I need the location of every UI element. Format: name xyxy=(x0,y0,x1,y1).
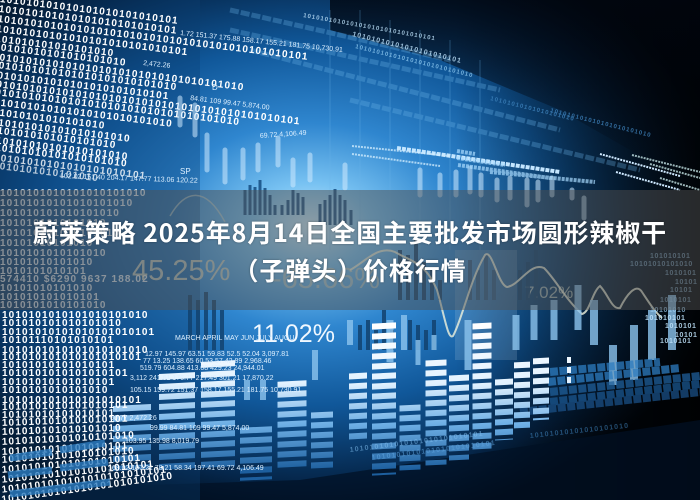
large percentage labels xyxy=(132,255,573,348)
upper-left data numbers: 2,472.26 xyxy=(143,60,171,70)
right binary column: 10101 xyxy=(670,287,692,294)
lower candlesticks xyxy=(247,285,672,400)
lower-left binary block: 101010101010101010 xyxy=(2,423,122,438)
right binary column: 10101010101010 xyxy=(630,261,693,268)
lower numeric labels: 103.95 135.98 8,019.79 xyxy=(125,438,199,445)
right binary column: 1010101 xyxy=(665,323,696,330)
lower numeric labels: 77 13.25 138.65 60.53 57.42.89 2,968.46 xyxy=(143,358,272,365)
title xyxy=(33,214,667,288)
lower-left binary block: 10101010101010101010 xyxy=(2,430,135,448)
lower-left binary block: 10101010101010101010101 xyxy=(1,459,155,486)
lower-left binary block: 10101010101010101010 xyxy=(1,446,135,466)
lower-left binary block: 10101110101010101 xyxy=(2,335,114,346)
upper-left binary block: 10101010101010101010101010101 xyxy=(0,24,189,58)
lower numeric labels: 99.99 84.81 109 99.47 5,874.00 xyxy=(150,425,249,432)
right binary column: 101010101 xyxy=(645,315,685,322)
upper-left data numbers: 69.72 4,106.49 xyxy=(260,130,307,140)
price line curve xyxy=(350,250,662,336)
band binary rows: 1010101010101010 xyxy=(0,248,107,259)
bottom binary reflection xyxy=(349,423,630,462)
large percentage labels: -65.66% xyxy=(272,263,380,295)
band binary rows: 101010101010101 xyxy=(0,292,100,303)
lower numeric labels: 12.97 145.97 63.51 59.83 52.5 52.04 3,097.81 xyxy=(145,351,289,358)
large percentage labels: 45.25% xyxy=(132,255,230,287)
upper-left data numbers: 84.81 109 99.47 5,874.00 xyxy=(190,95,270,112)
lower-left binary block: 1010101010101010101 xyxy=(2,414,129,429)
right binary column: 10101 xyxy=(675,332,697,339)
lower numeric labels: 3,112 241.61 176.77 217.49 301.21 17,870.22 xyxy=(130,375,274,382)
upper-left data numbers: SP xyxy=(180,167,191,176)
lower-left binary block: 1010101010101010101010101 xyxy=(1,465,168,496)
lower numeric labels: 105.15 159.72 151.37 158.17 155.21 181.75 10,730.91 xyxy=(130,387,301,394)
band binary rows: 1010101010101010 xyxy=(0,300,107,311)
lower-left binary block: 101010101010101010101 xyxy=(1,453,142,476)
upper binary rows: right: 10101010101010101010 xyxy=(490,96,575,123)
large percentage labels: 7.02% xyxy=(525,283,573,302)
lower-left binary block: 10101010101010101 xyxy=(2,377,115,388)
upper-left data numbers: D xyxy=(212,83,218,92)
lower-left binary block: 1010101010101010101 xyxy=(2,400,129,413)
upper binary rows: right: 10101010101010101010101 xyxy=(352,31,462,65)
mini bar cluster top center xyxy=(245,180,351,225)
right binary column: 1010101 xyxy=(665,270,696,277)
band binary rows: 10101010101010 xyxy=(0,238,93,249)
upper binary rows: right xyxy=(303,13,652,139)
band binary rows: 10101010101010 xyxy=(0,257,93,268)
lower numeric labels: 168.02 107.21 78.21 58.34 197.41 69.72 4,106.49 xyxy=(108,465,264,472)
upper binary rows: right: 101010101010101010101010 xyxy=(550,108,652,139)
upper binary rows: right: 1010101010101010101010101010101 xyxy=(303,13,436,42)
band binary rows: 101010101010101010 xyxy=(0,228,120,239)
right binary column: 1010101 xyxy=(660,338,691,345)
right binary column: 10101010 xyxy=(650,307,686,314)
lower-left binary block: 101010101010101010 xyxy=(2,318,122,329)
lower numeric labels xyxy=(108,335,301,472)
lower numeric labels: 519.79 604.88 413.08 429.23 24,944.01 xyxy=(140,365,265,372)
lower-left binary block: 1010101010101010101 xyxy=(2,368,129,379)
lower-left binary block: 1010101010101010101010 xyxy=(2,345,149,356)
title: （子弹头）价格行情 xyxy=(233,252,467,288)
translucent title band xyxy=(0,190,700,310)
upper-left data numbers: 1.72 151.37 175.88 158.17 155.21 181.75 10,730.91 xyxy=(180,30,343,54)
bottom binary reflection: 10101010101010101010 xyxy=(529,423,630,440)
lower-left blue tiles xyxy=(8,443,110,494)
band binary rows: 101010101010101010 xyxy=(0,208,120,219)
band binary rows: 10101010101010101010 xyxy=(0,198,133,209)
upper-left data numbers xyxy=(60,30,343,185)
upper candlesticks xyxy=(180,98,584,218)
right binary column: 1010101 xyxy=(660,297,691,304)
lower-left binary block: 101010101010101010101 xyxy=(2,395,142,406)
lower-left binary block: 1010101010101010 xyxy=(2,385,109,396)
lower numeric labels: MARCH APRIL MAY JUN JULY AUGU xyxy=(175,335,294,342)
lower stacked white bars xyxy=(132,323,569,480)
lower right square grid xyxy=(520,362,700,412)
right binary column xyxy=(630,253,697,345)
middle bars behind band xyxy=(190,240,536,350)
band binary rows: 574410 $6290 9637 188.02 xyxy=(0,274,149,285)
upper binary rows: right: 1010101010101010101010101010 xyxy=(355,44,474,79)
band binary rows: 1010101010101 xyxy=(0,266,87,277)
lower-left binary block: 10101010101010101 xyxy=(2,408,115,421)
band binary rows: 1010101010101010 xyxy=(0,218,107,229)
arch curve xyxy=(170,195,225,222)
middle bright data dashes xyxy=(352,146,700,190)
data table panel xyxy=(455,250,517,360)
right binary column: 101010101 xyxy=(650,253,690,260)
band binary rows: 1010101010101010101010 xyxy=(0,188,147,199)
large percentage labels: 11.02% xyxy=(252,320,335,348)
upper-left binary block: 101010101010101010101010101 xyxy=(0,4,178,37)
upper grid squares xyxy=(230,10,640,250)
bottom binary reflection: 1010101010101010101010101 xyxy=(371,440,496,462)
bottom binary reflection: 101010101010101010101010101 xyxy=(349,431,484,454)
band binary rows xyxy=(0,188,149,311)
lower-left binary block: 1010101010101010101 xyxy=(2,440,129,458)
lower-left binary block: 10101010101010101010101 xyxy=(2,327,155,338)
title: 蔚莱策略 2025年8月14日全国主要批发市场圆形辣椒干 xyxy=(33,214,667,250)
lower-left binary block: 101010101010101010101 xyxy=(2,352,142,363)
right binary column: 10101 xyxy=(675,279,697,286)
lower numeric labels: 60.77 2,472.26 xyxy=(110,415,157,422)
lower-left binary block xyxy=(1,310,174,500)
lower-left binary block: 1010101010101010101010 xyxy=(2,310,149,321)
band binary rows: 10101010101010 xyxy=(0,283,93,294)
upper-left binary block: 10101010101010101010101010101010101010101010101 xyxy=(0,14,309,63)
lower-left binary block: 10101010101010101 xyxy=(2,360,115,371)
upper-left data numbers: 102.02 151.40 204.17 147.77 113.06 120.22 xyxy=(60,173,198,185)
upper-left binary block xyxy=(0,0,311,208)
